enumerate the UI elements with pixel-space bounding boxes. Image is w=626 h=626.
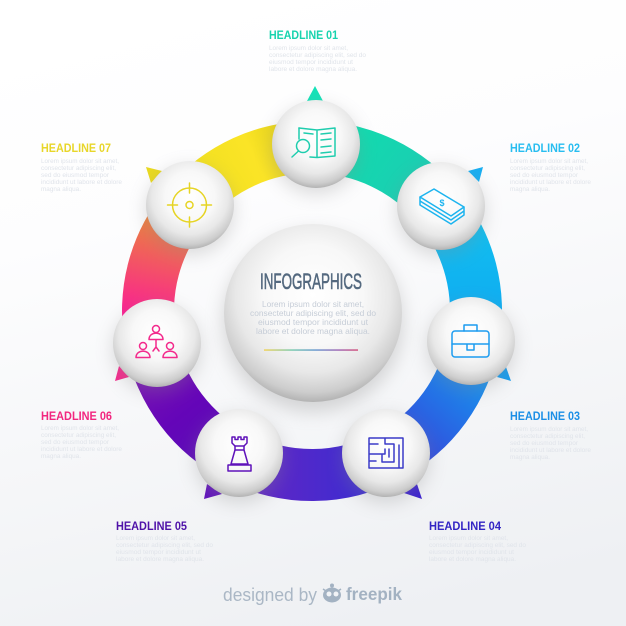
footer credit <box>223 584 402 605</box>
center body text: labore et dolore magna aliqua. <box>256 326 370 336</box>
headline 04 block: labore et dolore magna aliqua. <box>429 556 516 563</box>
arrow segment 1 teal <box>307 86 460 224</box>
arrow segment 3 blue <box>377 335 511 479</box>
center title: INFOGRAPHICS <box>260 269 362 294</box>
headline 02 block: consectetur adipiscing elit, <box>510 165 585 172</box>
headline 07 block: HEADLINE 07 <box>41 143 111 155</box>
center body text: eiusmod tempor incididunt ut <box>258 317 369 327</box>
headline 05 block: eiusmod tempor incididunt ut <box>116 549 201 556</box>
icon: maze <box>369 438 403 468</box>
headline 07 block: sed do eiusmod tempor <box>41 172 110 179</box>
headline 02 block: incididunt ut labore et dolore <box>510 179 591 186</box>
headline 07 block: Lorem ipsum dolor sit amet, <box>41 158 119 165</box>
headline 07 block <box>41 143 122 193</box>
headline 03 block: sed do eiusmod tempor <box>510 440 579 447</box>
icon: briefcase <box>452 325 489 357</box>
node 4 with maze icon <box>342 409 430 503</box>
headline 07 block: magna aliqua. <box>41 186 81 193</box>
headline 04 block <box>429 521 526 563</box>
arrow segment 6 pink <box>115 186 208 381</box>
icon: book and magnifier <box>292 128 335 158</box>
headline 06 block <box>41 411 122 460</box>
headline 07 block: consectetur adipiscing elit, <box>41 165 116 172</box>
icon: banknotes: $ <box>439 198 445 208</box>
rainbow line <box>264 349 358 351</box>
headline 02 block: sed do eiusmod tempor <box>510 172 579 179</box>
headline 01 block: consectetur adipiscing elit, sed do <box>269 52 366 59</box>
headline 03 block <box>510 411 591 461</box>
center body text: Lorem ipsum dolor sit amet, <box>262 299 364 309</box>
headline 04 block: eiusmod tempor incididunt ut <box>429 549 514 556</box>
headline 01 block: Lorem ipsum dolor sit amet, <box>269 45 348 52</box>
node 2 with money icon <box>397 162 485 256</box>
headline 02 block: magna aliqua. <box>510 186 550 193</box>
headline 03 block: consectetur adipiscing elit, <box>510 433 585 440</box>
arrow segment 7 yellow <box>146 121 312 220</box>
headline 04 block: Lorem ipsum dolor sit amet, <box>429 535 508 542</box>
node 3 with briefcase icon <box>427 297 515 391</box>
headline 03 block: Lorem ipsum dolor sit amet, <box>510 426 588 433</box>
node 7 with target icon <box>146 161 234 255</box>
arrow segment 5 purple <box>126 337 249 499</box>
footer credit: freepik <box>346 584 402 604</box>
arrow segment 4 indigo <box>226 433 422 501</box>
headline 07 block: incididunt ut labore et dolore <box>41 179 122 186</box>
headline 06 block: incididunt ut labore et dolore <box>41 446 122 453</box>
headline 05 block: Lorem ipsum dolor sit amet, <box>116 535 195 542</box>
arrow segment 2 cyan <box>419 167 502 344</box>
headline 01 block: HEADLINE 01 <box>269 30 339 42</box>
headline 02 block: Lorem ipsum dolor sit amet, <box>510 158 588 165</box>
headline 05 block <box>116 521 213 563</box>
headline 03 block: incididunt ut labore et dolore <box>510 447 591 454</box>
headline 02 block: HEADLINE 02 <box>510 143 580 155</box>
node 5 with chess rook icon <box>195 409 283 503</box>
headline 06 block: magna aliqua. <box>41 453 81 460</box>
headline 02 block <box>510 143 591 193</box>
center body text <box>250 299 376 336</box>
headline 05 block: consectetur adipiscing elit, sed do <box>116 542 213 549</box>
icon: freepik mascot <box>323 584 341 602</box>
icon: people hierarchy <box>136 326 177 358</box>
headline 03 block: HEADLINE 03 <box>510 411 580 423</box>
headline 05 block: labore et dolore magna aliqua. <box>116 556 204 563</box>
icon: chess rook <box>228 437 251 471</box>
headline 01 block: labore et dolore magna aliqua. <box>269 66 357 73</box>
headline 06 block: consectetur adipiscing elit, <box>41 432 116 439</box>
ring of arrows <box>115 86 511 501</box>
headline 04 block: consectetur adipiscing elit, sed do <box>429 542 526 549</box>
headline 03 block: magna aliqua. <box>510 454 550 461</box>
headline 06 block: Lorem ipsum dolor sit amet, <box>41 425 119 432</box>
headline 04 block: HEADLINE 04 <box>429 521 502 533</box>
node 1 with book icon <box>272 100 360 194</box>
headline 01 block <box>269 30 366 73</box>
headline 05 block: HEADLINE 05 <box>116 521 188 533</box>
headline 06 block: HEADLINE 06 <box>41 411 112 423</box>
icon: target <box>168 183 212 227</box>
node 6 with team icon <box>113 299 201 393</box>
footer credit: designed by <box>223 585 317 605</box>
central sphere <box>223 224 403 412</box>
headline 01 block: eiusmod tempor incididunt ut <box>269 59 353 66</box>
headline 06 block: sed do eiusmod tempor <box>41 439 110 446</box>
center body text: consectetur adipiscing elit, sed do <box>250 308 376 318</box>
